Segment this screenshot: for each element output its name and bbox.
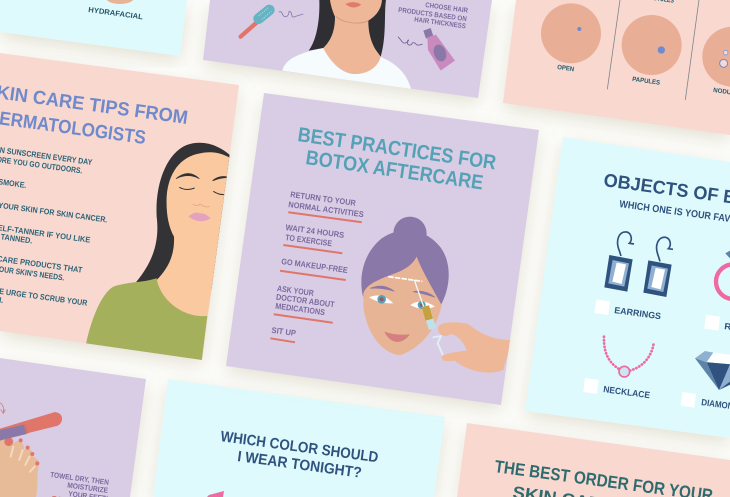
- icon: necklace: [604, 337, 654, 377]
- icon: foot: [0, 436, 39, 497]
- panel: skin care tips from dermatologists: [0, 53, 239, 362]
- face: [363, 257, 442, 355]
- chart: open: [541, 3, 601, 63]
- illustration: face receiving injection: [361, 217, 512, 373]
- step: wait 24 hours: WAIT 24 HOURS: [285, 223, 345, 240]
- panel: best practices for botox aftercare: [226, 93, 539, 405]
- step: return to normal activities: RETURN TO YOUR: [290, 190, 356, 208]
- step: return to normal activities: NORMAL ACTIVITIES: [288, 200, 365, 219]
- icon: nail file: [0, 412, 62, 441]
- panel: acne types: [503, 0, 730, 135]
- title: which color should I wear tonight: [219, 428, 379, 482]
- title: best practices for botox aftercare: BEST PRACTICES FOR: [296, 123, 498, 174]
- text: tips list: [0, 143, 108, 308]
- labels: objects: NECKLACE: [603, 384, 651, 400]
- hand: [438, 322, 512, 373]
- icon: hair product bottle: [423, 28, 455, 71]
- icon: hairbrush: [241, 7, 271, 37]
- eyes and brows: [369, 286, 435, 309]
- list: aftercare steps: [270, 190, 365, 342]
- labels: objects: [603, 305, 730, 412]
- step: sit up: SIT UP: [271, 326, 297, 338]
- syringe: [414, 280, 443, 356]
- checkbox: necklace: [583, 378, 599, 394]
- checkbox: ring: [704, 315, 720, 331]
- title: which color should I wear tonight: WHICH COLOR SHOULD: [219, 428, 379, 466]
- hair: [393, 216, 427, 236]
- title: best practices for botox aftercare: BOTOX AFTERCARE: [304, 146, 485, 194]
- labels: acne types: PAPULES: [632, 76, 661, 87]
- icon: hydrafacial face fragment: [106, 0, 134, 4]
- text: hair thickness tip: [398, 2, 468, 30]
- step: ask your doctor: MEDICATIONS: [275, 302, 326, 317]
- icon: squiggle right: [398, 37, 423, 45]
- panel: foot care: [0, 358, 146, 497]
- panel: objects of beauty: [525, 137, 730, 438]
- panel: hydrafacial: [0, 0, 187, 56]
- step: return to normal activities: [288, 190, 365, 222]
- text: hair thickness tip: HAIR THICKNESS: [414, 17, 466, 30]
- panel: best order for skin care: [457, 423, 730, 497]
- labels: acne types: [557, 0, 730, 98]
- lips: [384, 332, 410, 342]
- label: hydrafacial: HYDRAFACIAL: [88, 5, 144, 21]
- chart: nodules: [702, 27, 730, 87]
- text: towel dry tip: [50, 470, 109, 497]
- icon: earrings: [604, 232, 673, 297]
- checkbox: diamond: [681, 392, 696, 408]
- illustration: woman with closed eyes: [86, 143, 233, 362]
- icon: curved arrow: [0, 403, 5, 413]
- step: wait 24 hours: TO EXERCISE: [285, 233, 333, 248]
- labels: acne types: OPEN: [557, 64, 575, 73]
- checkbox: earrings: [594, 299, 610, 315]
- dashed guide: [388, 277, 422, 281]
- labels: objects: EARRINGS: [614, 305, 662, 321]
- step: go makeup-free: GO MAKEUP-FREE: [281, 257, 349, 275]
- text: hair thickness tip: PRODUCTS BASED ON: [398, 7, 467, 23]
- step: wait 24 hours: [283, 223, 345, 253]
- text: towel dry tip: TOWEL DRY, THEN: [50, 470, 109, 487]
- title: which color should I wear tonight: I WEAR TONIGHT?: [236, 448, 363, 482]
- icon: ring: [716, 251, 730, 299]
- text: towel dry tip: MOISTURIZE: [67, 481, 109, 495]
- illustration: woman with long hair: [282, 0, 411, 89]
- icon: pink garment fragment: [207, 491, 224, 497]
- panel: hair care tips: [203, 0, 492, 98]
- panel: which color: [153, 379, 445, 497]
- text: hair thickness tip: CHOOSE HAIR: [425, 2, 468, 15]
- icon: squiggle left: [279, 11, 303, 17]
- step: ask your doctor: ASK YOUR: [276, 284, 314, 298]
- chart: papules: [622, 15, 682, 75]
- icon: diamond: [695, 351, 730, 390]
- step: ask your doctor: DOCTOR ABOUT: [275, 293, 335, 309]
- step: ask your doctor: [274, 284, 335, 323]
